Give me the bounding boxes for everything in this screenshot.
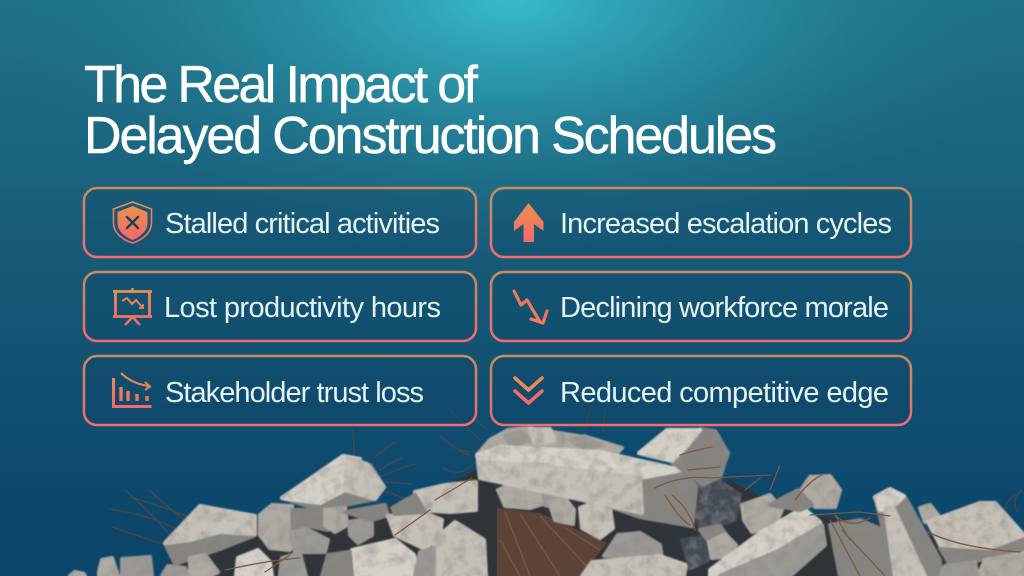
top rocks [477, 428, 622, 470]
block B [282, 465, 384, 510]
icon: zigzag down arrow [514, 291, 547, 323]
icon: shield with x [114, 202, 152, 243]
front rebar [225, 447, 1020, 576]
icon: presentation board with falling line [113, 288, 152, 325]
title [84, 56, 777, 165]
icon: up arrow [514, 203, 544, 242]
title: Delayed Construction Schedules [84, 107, 777, 165]
right blocks [830, 520, 905, 576]
label: Declining workforce morale [560, 292, 889, 324]
rust sheet [497, 508, 607, 576]
dark base mass [160, 470, 1024, 576]
label: Increased escalation cycles [560, 208, 892, 240]
card: stakeholder trust loss [84, 356, 476, 425]
card: declining workforce morale [491, 272, 911, 341]
icon: declining bar chart [114, 373, 152, 406]
rocks beneath beam [690, 478, 740, 530]
card: increased escalation cycles [491, 188, 911, 257]
left blocks [99, 558, 118, 576]
card: lost productivity hours [84, 272, 476, 341]
concrete rubble pile [70, 405, 1024, 576]
card: reduced competitive edge [491, 356, 911, 425]
label: Stakeholder trust loss [165, 377, 424, 409]
icon: double chevron down [515, 378, 542, 403]
card: stalled critical activities [84, 188, 476, 257]
rebar strands behind the rubble [110, 405, 1022, 545]
big beam [478, 462, 696, 526]
lower centre rocks [604, 533, 662, 558]
top right block [673, 429, 728, 484]
block A [165, 520, 255, 564]
rocks centre left [260, 505, 293, 550]
title: The Real Impact of [84, 56, 479, 114]
label: Stalled critical activities [165, 208, 440, 240]
label: Reduced competitive edge [560, 377, 889, 409]
label: Lost productivity hours [164, 292, 441, 324]
